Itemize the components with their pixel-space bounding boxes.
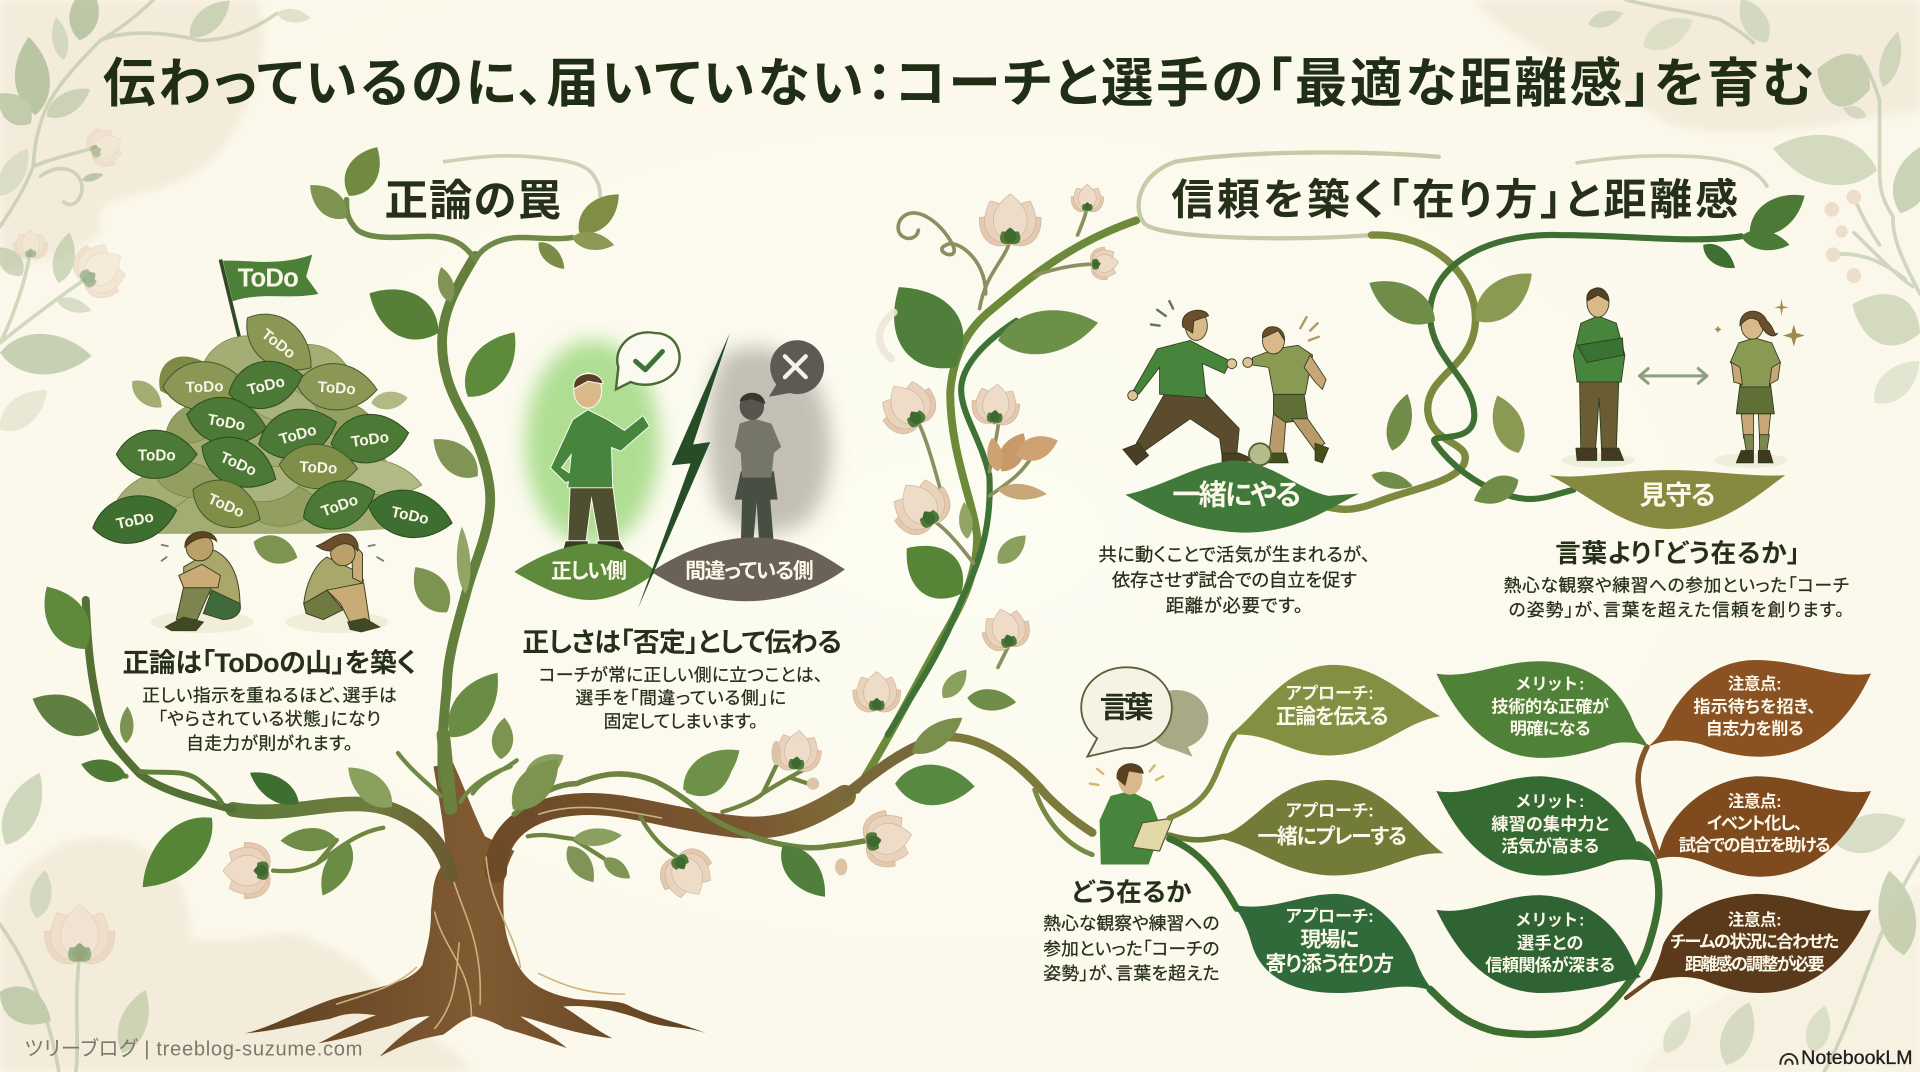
caution leaf 2 — [1655, 776, 1871, 877]
lightning bolt — [638, 333, 730, 609]
todo leaf: ToDo — [319, 492, 361, 520]
mound — [120, 349, 422, 534]
ToDo leaf pile — [88, 300, 457, 570]
illustration: playing together: 一緒にやる — [1172, 479, 1301, 510]
merit leaf 1 — [1436, 661, 1648, 758]
todo leaf: ToDo — [299, 459, 338, 478]
leaf label: watch over — [1549, 470, 1785, 529]
big flowering vine — [857, 220, 1136, 790]
text block: ToDo mountain: 正しい指示を重ねるほど、選手は — [142, 686, 397, 706]
standing coach — [1573, 288, 1625, 460]
text block: ToDo mountain: 正論は「ToDoの山」を築く — [122, 648, 416, 678]
main left vine — [442, 256, 490, 784]
approach leaf 2 — [1220, 780, 1444, 875]
flag: ToDo — [238, 265, 299, 293]
double arrow — [1640, 369, 1707, 383]
text block: how to be: 参加といった「コーチの — [1043, 939, 1220, 959]
approach leaf 3 — [1233, 894, 1435, 993]
text block: presence over words: の姿勢」が、言葉を超えた信頼を創ります。 — [1509, 600, 1844, 620]
section heading: trust building — [1139, 152, 1813, 512]
text block: how to be: どう在るか — [1071, 878, 1192, 907]
todo leaf — [233, 300, 325, 386]
approach leaf 2: 一緒にプレーする — [1258, 826, 1407, 849]
leaf label: right side — [514, 544, 656, 600]
merit leaf 2: 練習の集中力と — [1491, 814, 1609, 834]
text block: together: 距離が必要です。 — [1166, 595, 1303, 616]
heading vine frame right — [1577, 156, 1767, 186]
vine leaves — [1361, 268, 1444, 336]
approach leaf 1: アプローチ: — [1286, 683, 1374, 703]
merit leaf 3 — [1436, 895, 1641, 993]
todo leaf: ToDo — [217, 449, 259, 480]
merit leaves — [1436, 661, 1653, 993]
left olive branch — [233, 804, 451, 875]
caution leaf 2: イベント化し、 — [1707, 813, 1802, 833]
todo leaf — [162, 360, 247, 411]
merit leaf 1: 明確になる — [1510, 719, 1591, 739]
merit leaf 3: 信頼関係が深まる — [1485, 955, 1615, 975]
caution leaf 1: 注意点: — [1728, 674, 1782, 693]
todo leaf — [88, 488, 181, 551]
text block: presence over words — [1504, 539, 1849, 620]
caution leaf 1: 指示待ちを招き、 — [1693, 697, 1816, 717]
central tree with branches — [86, 156, 1136, 1057]
running coach — [1123, 310, 1256, 465]
caution leaf 2: 試合での自立を助ける — [1679, 835, 1831, 855]
right twig branches — [514, 774, 869, 848]
todo leaf — [328, 409, 412, 468]
todo leaf: ToDo — [205, 490, 247, 521]
text block: presence over words: 熱心な観察や練習への参加といった「コーチ — [1504, 575, 1849, 595]
approach leaf 3: 寄り添う在り方 — [1265, 953, 1394, 976]
leaf label: wrong side: 間違っている側 — [685, 560, 814, 583]
caution leaf 3: 距離感の調整が必要 — [1685, 954, 1824, 974]
caution leaf 3 — [1647, 894, 1871, 993]
tree leaves — [25, 139, 1120, 911]
coach with clipboard — [1090, 763, 1173, 864]
NotebookLM logo: NotebookLM — [1801, 1047, 1913, 1069]
merit leaf 1: 技術的な正確が — [1491, 697, 1609, 717]
text block: ToDo mountain — [122, 648, 416, 753]
caution leaf 1: 自志力を削る — [1706, 719, 1804, 739]
heading vine frame — [1139, 152, 1439, 238]
speech bubbles: words: 言葉 — [1100, 692, 1153, 725]
text block: ToDo mountain: 自走力が則がれます。 — [186, 733, 353, 753]
text block: how to be: 姿勢」が、言葉を超えた — [1043, 964, 1220, 984]
heading arc — [445, 156, 600, 196]
speech bubbles: words — [1081, 667, 1208, 757]
todo leaf — [252, 399, 343, 468]
cross bubble — [769, 340, 824, 397]
approach leaf 1: 正論を伝える — [1276, 706, 1389, 729]
leaf label: together — [1125, 460, 1359, 533]
text block: together — [1098, 544, 1370, 616]
caution leaf 1 — [1648, 660, 1871, 757]
text block: presence over words: 言葉より「どう在るか」 — [1555, 539, 1800, 568]
todo leaf — [192, 425, 285, 500]
todo leaf: ToDo — [390, 504, 430, 528]
todo leaf: ToDo — [138, 447, 176, 464]
todo leaf: ToDo — [185, 378, 224, 396]
merit leaf 2: 活気が高まる — [1501, 836, 1599, 856]
text block: how to be — [1043, 878, 1220, 984]
stray leaves — [149, 345, 213, 406]
stems — [1169, 735, 1234, 818]
illustration: playing together — [1123, 301, 1359, 533]
left player — [165, 532, 240, 631]
approach leaf 3: アプローチ: — [1286, 906, 1374, 926]
right player — [304, 534, 380, 632]
approach leaf 2: アプローチ: — [1286, 801, 1374, 821]
grey player figure — [735, 393, 781, 545]
text block: together: 依存させず試合での自立を促す — [1112, 570, 1357, 591]
leaf label: right side: 正しい側 — [551, 560, 627, 583]
text block: together: 共に動くことで活気が生まれるが、 — [1098, 544, 1370, 565]
check bubble — [616, 332, 680, 389]
merit leaf 3: 選手との — [1517, 933, 1583, 953]
todo leaf: ToDo — [115, 508, 155, 533]
brown right branch — [496, 796, 845, 872]
woven vines — [1316, 235, 1475, 509]
todo leaf — [223, 353, 308, 416]
running player — [1243, 327, 1329, 463]
todo leaf: ToDo — [246, 373, 287, 399]
text block: rightness as denial: 正しさは「否定」として伝わる — [522, 627, 842, 657]
tree trunk and roots — [245, 763, 707, 1057]
merit leaf 3: メリット: — [1516, 911, 1584, 930]
text block: rightness as denial — [522, 627, 842, 731]
todo leaf: ToDo — [206, 411, 246, 434]
text block: ToDo mountain: 「やらされている状態」になり — [158, 709, 381, 729]
approach leaf 1 — [1232, 665, 1440, 755]
caution leaves — [1647, 660, 1871, 993]
leaf label: wrong side — [651, 538, 845, 601]
sitting players — [151, 532, 388, 633]
section heading: trap of sound arguments: 正論の罠 — [385, 178, 561, 226]
caution leaf 3: チームの状況に合わせた — [1670, 932, 1839, 952]
todo leaf — [296, 470, 383, 539]
todo leaf: ToDo — [317, 379, 356, 398]
todo leaf — [295, 361, 379, 413]
section heading: trust building: 信頼を築く「在り方」と距離感 — [1171, 176, 1738, 224]
green glow — [525, 340, 660, 546]
girl player — [1730, 311, 1780, 463]
flag — [220, 255, 318, 345]
grey wash — [708, 347, 831, 533]
text block: rightness as denial: 固定してしまいます。 — [604, 711, 758, 731]
merit leaf 2: メリット: — [1516, 792, 1584, 811]
illustration: watching over — [1549, 288, 1805, 529]
mound leaves — [106, 329, 425, 528]
todo leaf: ToDo — [350, 429, 390, 451]
todo leaf: ToDo — [277, 422, 319, 448]
todo leaf — [363, 483, 457, 546]
todo leaf — [278, 442, 359, 491]
caution leaf 3: 注意点: — [1728, 911, 1782, 930]
text block: rightness as denial: コーチが常に正しい側に立つことは、 — [539, 665, 823, 685]
ball — [1249, 443, 1271, 465]
todo leaf — [116, 430, 197, 478]
footer credit: ツリーブログ | treeblog-suzume.com — [25, 1036, 362, 1060]
sparkles — [1714, 299, 1805, 347]
todo leaf — [183, 391, 270, 451]
approach leaf 3: 現場に — [1300, 928, 1359, 951]
text block: rightness as denial: 選手を「間違っている側」に — [576, 688, 786, 708]
caution leaf 2: 注意点: — [1728, 792, 1782, 811]
text block: how to be: 熱心な観察や練習への — [1043, 913, 1220, 933]
illustration: watching over: 見守る — [1640, 480, 1715, 510]
todo leaf: ToDo — [258, 326, 298, 363]
panel: right vs wrong — [514, 332, 845, 609]
todo leaf — [184, 469, 269, 540]
merit leaf 1: メリット: — [1516, 674, 1584, 693]
bark highlights — [337, 807, 661, 1029]
approach leaves and stems — [1169, 665, 1659, 1034]
heading vine left — [347, 200, 572, 260]
title: 伝わっているのに、届いていない：コーチと選手の「最適な距離感」を育む — [103, 55, 1815, 114]
coach figure — [551, 373, 649, 550]
merit leaf 2 — [1436, 776, 1653, 875]
